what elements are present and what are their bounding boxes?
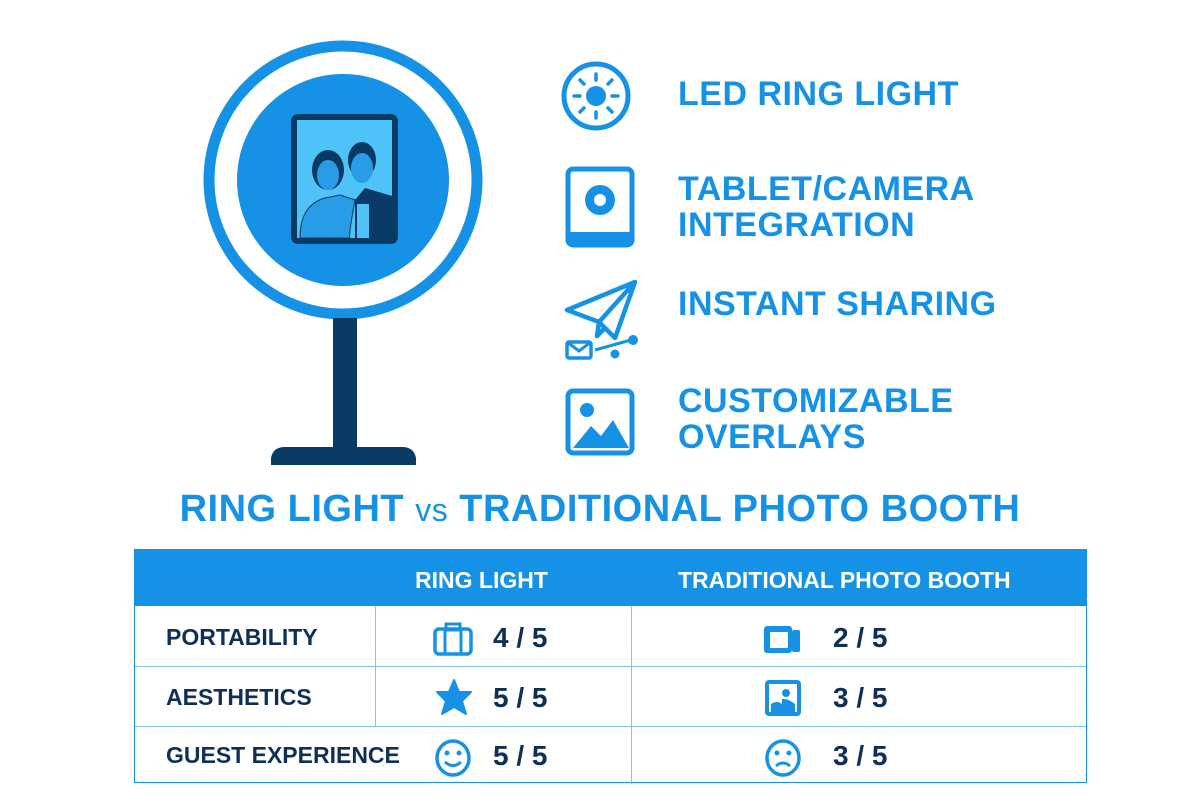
comparison table: 5 / 5 xyxy=(493,740,547,771)
ring xyxy=(209,46,477,314)
table header: TRADITIONAL PHOTO BOOTH xyxy=(678,567,1011,593)
comparison table: 2 / 5 xyxy=(833,622,887,653)
row: guest experience: GUEST EXPERIENCE xyxy=(166,742,400,768)
icon: tablet camera xyxy=(566,166,634,248)
feature: customizable overlays: CUSTOMIZABLE xyxy=(678,382,953,420)
comparison table: 4 / 5 xyxy=(493,622,547,653)
icon: image overlay xyxy=(566,388,634,456)
table header xyxy=(135,550,1086,606)
row: portability: PORTABILITY xyxy=(166,624,318,650)
table header: RING LIGHT xyxy=(415,567,548,593)
feature: LED ring light: LED RING LIGHT xyxy=(678,75,959,113)
photo frame xyxy=(291,114,398,244)
illustration: ring light xyxy=(204,40,482,465)
icon: sun xyxy=(562,62,630,130)
feature: tablet/camera integration xyxy=(678,170,975,244)
comparison table: 3 / 5 xyxy=(833,740,887,771)
feature: instant sharing: INSTANT SHARING xyxy=(678,285,997,323)
feature: customizable overlays: OVERLAYS xyxy=(678,418,866,456)
icon: paper plane share xyxy=(564,280,638,360)
feature: customizable overlays xyxy=(678,382,953,456)
comparison table: 5 / 5 xyxy=(493,682,547,713)
feature: tablet/camera integration: INTEGRATION xyxy=(678,206,915,244)
row: aesthetics: AESTHETICS xyxy=(166,684,312,710)
stand xyxy=(271,318,416,465)
title: RING LIGHT vs TRADITIONAL PHOTO BOOTH xyxy=(180,488,1020,530)
comparison table: 3 / 5 xyxy=(833,682,887,713)
comparison table xyxy=(134,549,1087,783)
feature: tablet/camera integration: TABLET/CAMERA xyxy=(678,170,975,208)
